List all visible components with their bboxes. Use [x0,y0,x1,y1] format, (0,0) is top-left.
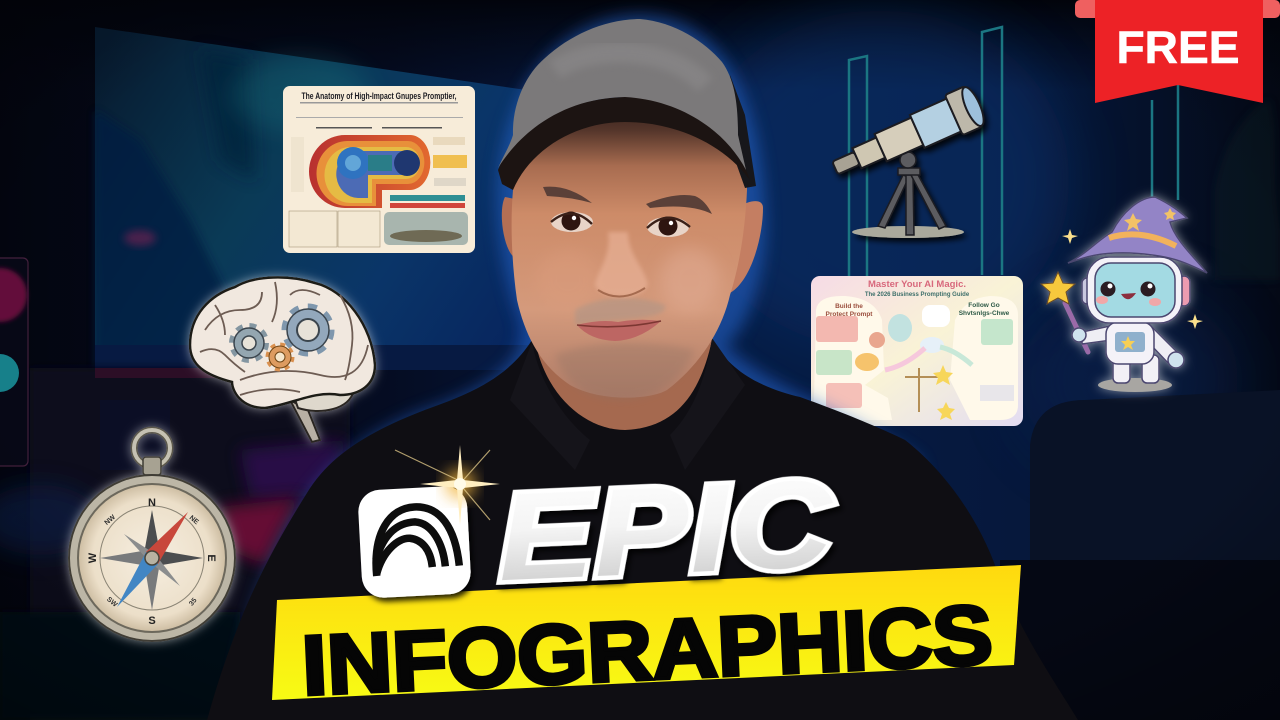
wall tv screen [95,27,540,370]
mouth [577,320,661,341]
shirt [207,338,1078,720]
arms [1082,326,1112,344]
infographic card: ai magic: Master Your AI Magic. [868,279,966,290]
compass: W [87,552,99,563]
legs [1113,355,1130,383]
compass: S [148,615,156,627]
hat [1068,197,1207,273]
cerebellum and stem [290,400,320,442]
man [207,19,1078,720]
brows [543,187,592,203]
left ear [502,197,520,258]
neck [535,340,712,430]
head [1087,257,1182,323]
yellow banner [272,565,1021,713]
logo tile [357,485,472,599]
nose [595,232,648,297]
neon frames on right wall [849,27,1178,280]
stubble [575,298,665,325]
infographic card: ai magic: Build the [835,303,863,310]
man halo [230,15,960,720]
cap underside [498,97,750,190]
wand and star [1065,303,1088,352]
infographic card: anatomy: The Anatomy of High-Impact Gnupes Promptier, [302,90,456,101]
right ear [730,201,763,293]
big gear [285,307,331,353]
compass: NE [188,515,200,526]
cap back mesh [730,75,756,188]
face [510,97,747,398]
sparkle [395,445,500,525]
telescope [826,84,988,238]
cap crown [498,19,746,170]
compass [69,430,235,641]
sparkles near robot [1062,229,1203,329]
orange gear [268,345,292,369]
compass: 35 [188,597,199,608]
sofa [1000,390,1280,720]
compass: SW [105,596,119,609]
compass: N [148,497,156,509]
infographic card: ai magic: Protect Prompt [826,311,873,318]
robot wizard [1041,197,1207,392]
infographic card: ai magic: Follow Go [968,302,1000,309]
headphones [1082,278,1092,304]
small gear [232,326,266,360]
brain with gears [190,277,375,442]
lower room with red and purple lights [0,368,350,720]
title: infographics: INFOGRAPHICS [300,587,995,713]
infographic card: anatomy [283,86,475,253]
infographic card: ai magic [811,276,1023,426]
left speaker [0,258,28,466]
free ribbon [1075,0,1280,103]
plant [1215,100,1280,280]
compass: NW [104,514,117,527]
infographic card: ai magic: Shvtsnlgs-Chwe [959,310,1010,317]
free ribbon: FREE [1116,22,1240,73]
eyes [551,212,593,232]
title: epic: EPIC [495,455,837,607]
body [1106,322,1154,364]
infographic card: ai magic: The 2026 Business Prompting Guide [865,292,970,298]
compass: E [205,554,217,562]
collar [510,342,590,470]
